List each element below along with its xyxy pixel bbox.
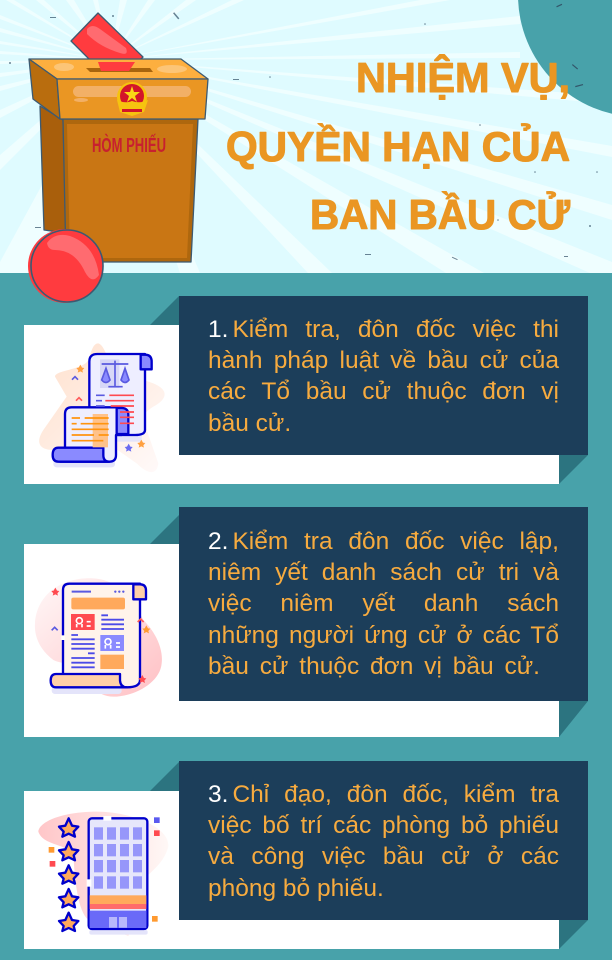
title: BAN BẦU CỬ [310,190,570,238]
title: QUYỀN HẠN CỦA [226,122,570,170]
text: task 3 [208,781,559,902]
title [226,53,571,238]
text: task 2: việc niêm yết danh sách [208,590,559,617]
icon: document list [35,578,162,697]
header background with sun rays [0,0,612,273]
text: task 2: 2. [208,528,228,555]
text: task 1: 1. [208,316,228,343]
text: task 1: hành pháp luật về bầu cử của [208,347,559,374]
text: task 2: niêm yết danh sách cử tri và [208,559,559,586]
title: NHIỆM VỤ, [356,53,570,101]
icon: building with star ratings [38,812,168,936]
text: task 1: Kiểm tra, đôn đốc việc thi [232,316,559,343]
icon: law scrolls with scales [39,344,164,470]
corner circle [518,0,612,114]
text: task 3: việc bố trí các phòng bỏ phiếu [208,812,559,839]
text: task 3: phòng bỏ phiếu. [208,875,384,902]
text: task 3: Chỉ đạo, đôn đốc, kiểm tra [232,781,559,808]
text: task 2 [208,528,559,680]
ballot box illustration [28,12,209,303]
text: task 1: bầu cử. [208,410,291,437]
red ballot card [71,13,143,71]
text: task 3: 3. [208,781,228,808]
box label: HÒM PHIẾU [92,133,166,157]
text: task 3: và công việc bầu cử ở các [208,843,559,870]
text: task 1: các Tổ bầu cử thuộc đơn vị [208,378,559,405]
text: task 2: Kiểm tra đôn đốc việc lập, [232,528,559,555]
red circle [28,229,103,303]
text: task 1 [208,316,559,437]
text: task 2: những người ứng cử ở các Tổ [208,622,559,649]
text: task 2: bầu cử thuộc đơn vị bầu cử. [208,653,540,680]
national emblem [117,82,148,116]
